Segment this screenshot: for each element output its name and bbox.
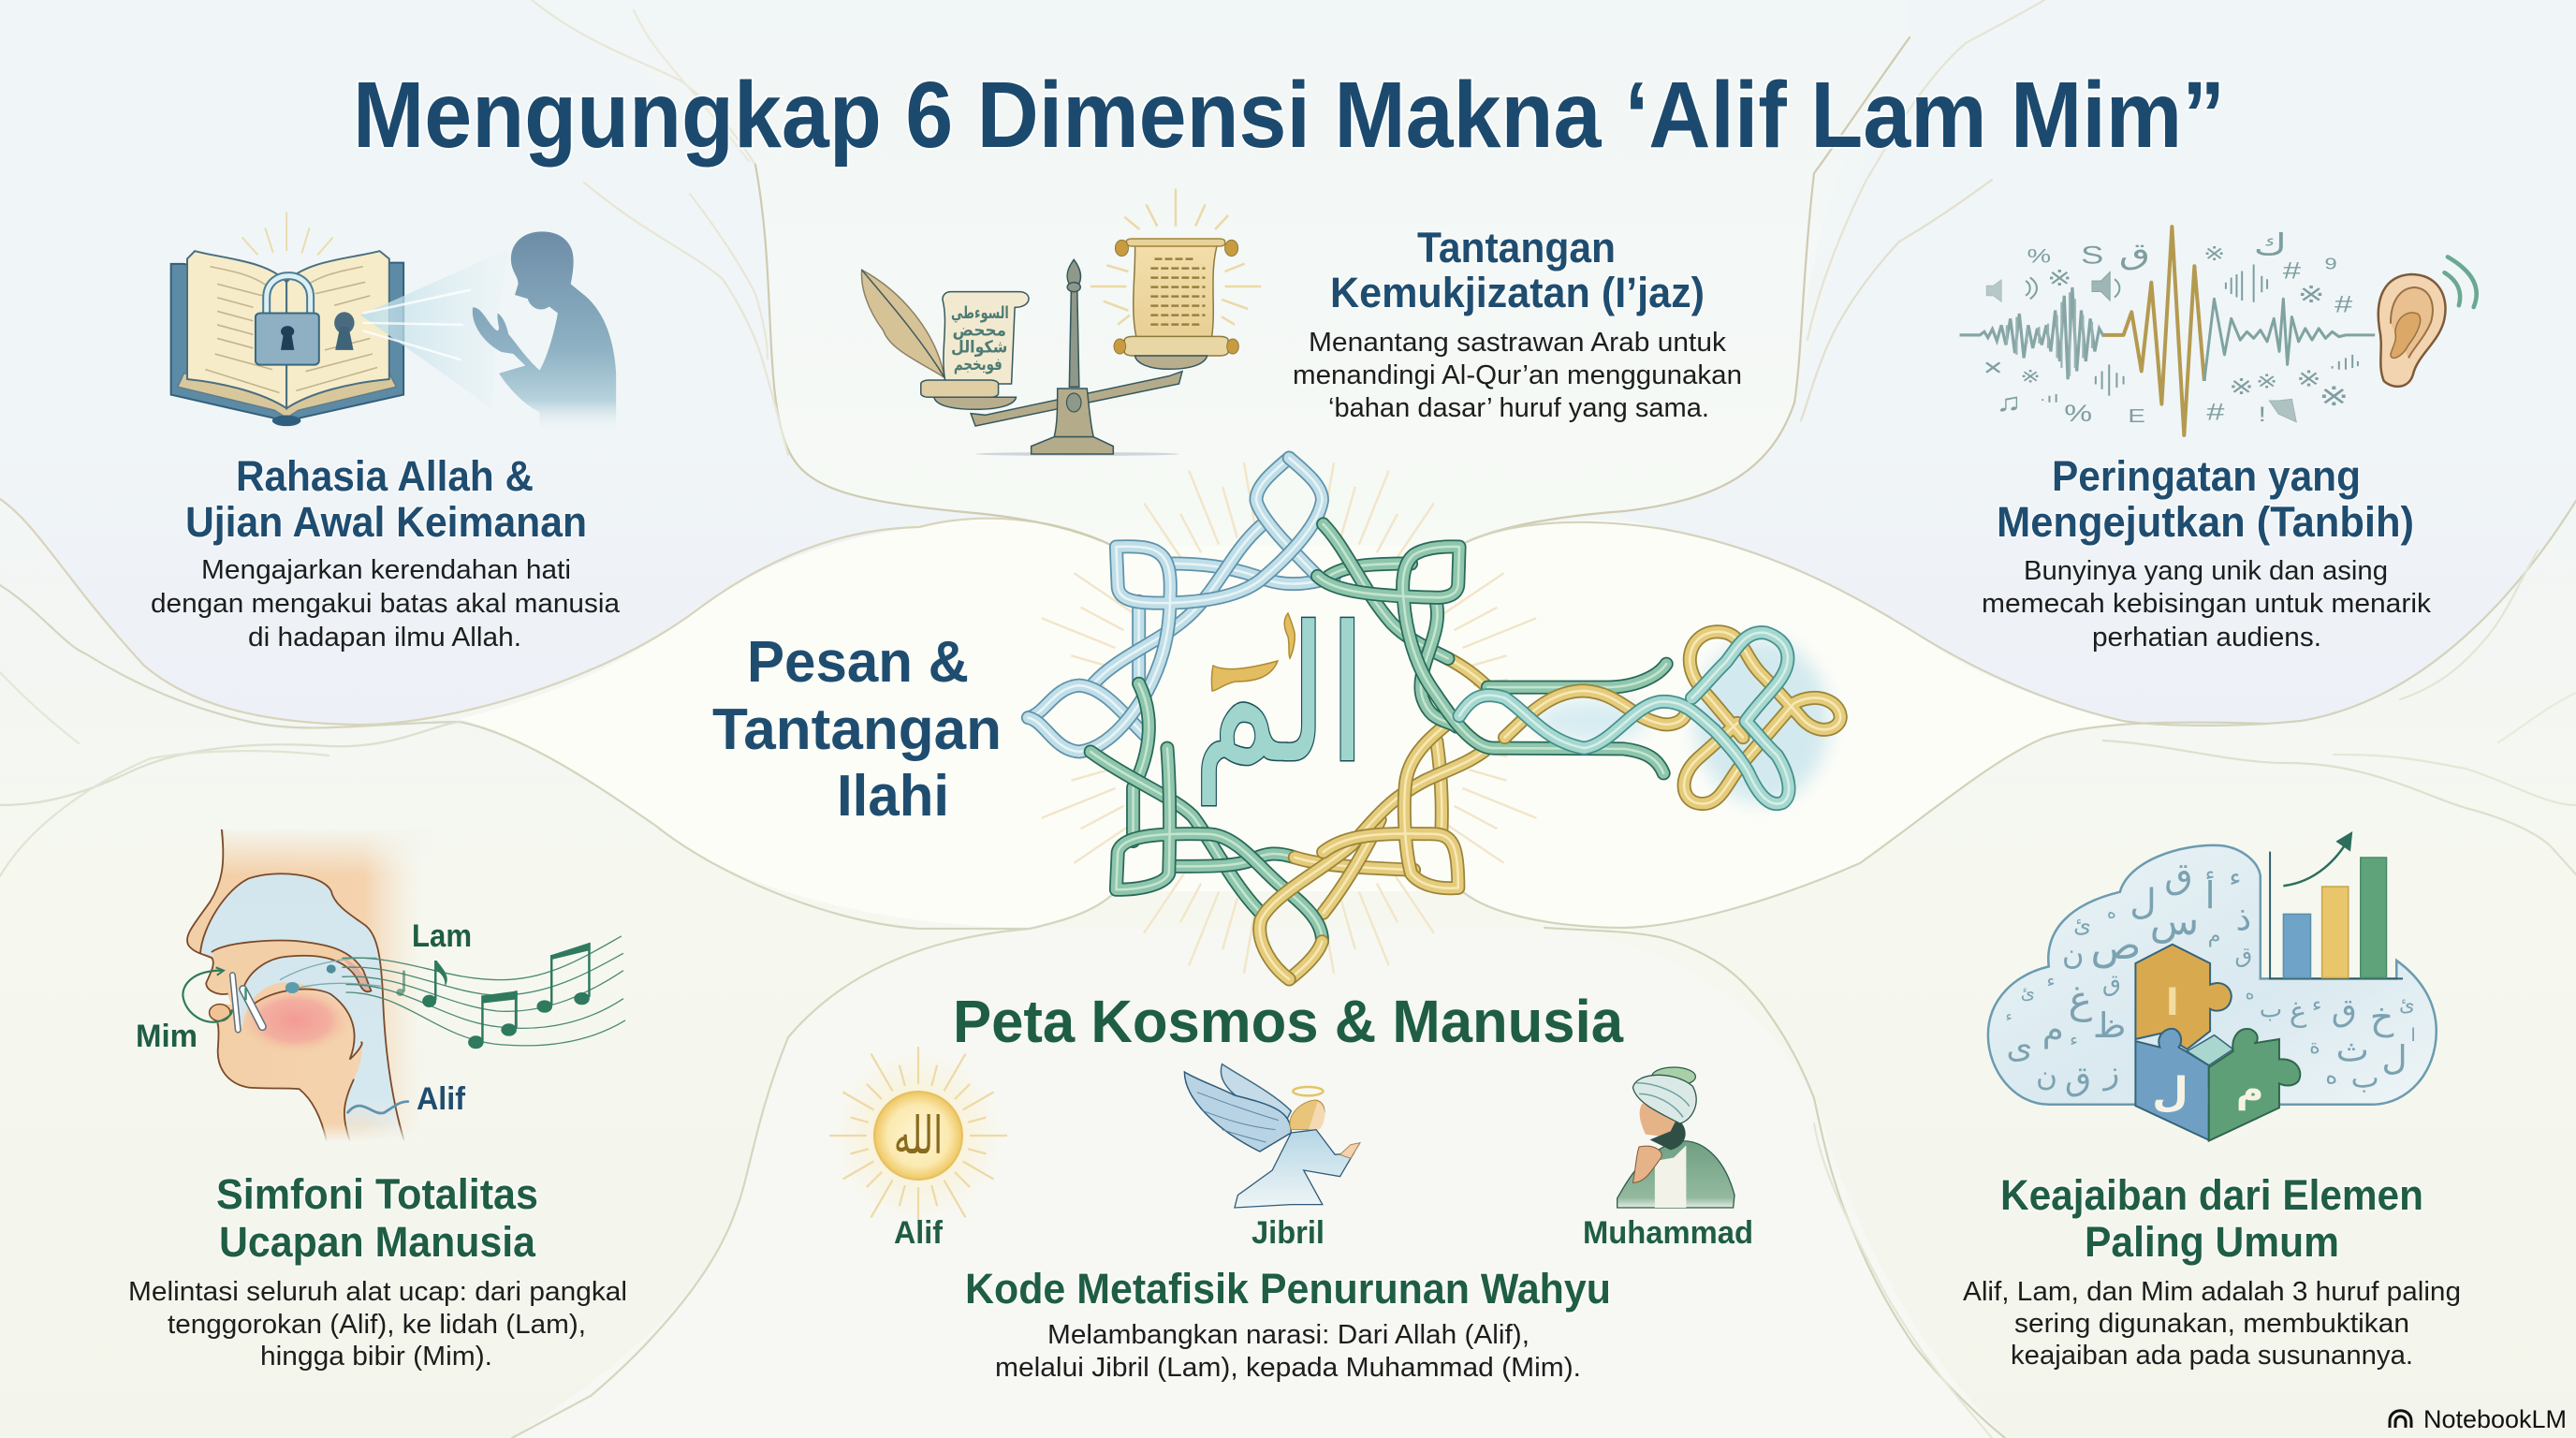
icon: sound wave and ear: [1960, 227, 2477, 435]
icon: letter cloud, puzzle and bar chart: س: [2150, 900, 2199, 944]
panel: Peta Kosmos dan Manusia: [829, 988, 1753, 1383]
heading: Simfoni Totalitas: Simfoni Totalitas: [216, 1170, 538, 1218]
panel: Pesan dan Tantangan Ilahi heading: Pesan &: [747, 630, 969, 695]
heading: Kode Metafisik Penurunan Wahyu: Kode Metafisik Penurunan Wahyu: [965, 1265, 1611, 1313]
text: Keajaiban description: [1963, 1277, 2461, 1371]
sun rays behind star: [1042, 462, 1536, 974]
label: Jibril: Jibril: [1251, 1215, 1325, 1251]
text: Peringatan description: memecah kebisingan untuk menarik: [1982, 589, 2432, 619]
heading: Peta Kosmos & Manusia: Peta Kosmos & Manusia: [953, 988, 1623, 1055]
text: Kode description: Melambangkan narasi: Dari Allah (Alif),: [1047, 1320, 1530, 1350]
icon: letter cloud, puzzle and bar chart: ن: [2062, 938, 2085, 971]
icon: balance scale with scrolls and quill: فويخجم: [954, 355, 1003, 374]
text: Rahasia Allah description: Mengajarkan kerendahan hati: [201, 555, 571, 585]
label: Mim: Mim: [136, 1019, 198, 1054]
icon: letter cloud, puzzle and bar chart: خ: [2370, 998, 2393, 1037]
heading: Simfoni Totalitas: [216, 1170, 538, 1266]
icon: sound wave and ear: !: [2258, 403, 2266, 426]
icon: sound wave and ear: ق: [2119, 238, 2150, 271]
logo: NotebookLM: NotebookLM: [2423, 1405, 2567, 1433]
icon: glowing sun medallion with Allah: [829, 1047, 1007, 1225]
icon: letter cloud, puzzle and bar chart: ق: [2332, 993, 2357, 1028]
heading: Tantangan Kemukjizatan: Kemukjizatan (I’jaz): [1330, 269, 1705, 316]
heading: Peringatan yang Mengejutkan: [1997, 452, 2414, 546]
heading: Rahasia Allah: Rahasia Allah &: [236, 452, 534, 500]
heading: Peringatan yang Mengejutkan: Mengejutkan (Tanbih): [1997, 498, 2414, 546]
icon: letter cloud, puzzle and bar chart: ذ: [2236, 900, 2251, 937]
icon: sound wave and ear: #: [2334, 292, 2352, 317]
icon: letter cloud, puzzle and bar chart: أ: [2204, 872, 2216, 917]
label: Alif: Alif: [894, 1215, 944, 1251]
panel: Simfoni Totalitas Ucapan Manusia: [128, 829, 627, 1372]
illustration: speech organs with music staff: [183, 829, 625, 1142]
icon: Muhammad figure: [1617, 1067, 1734, 1208]
text: Rahasia Allah description: dengan mengakui batas akal manusia: [151, 589, 621, 619]
text: Tantangan description: ‘bahan dasar’ huruf yang sama.: [1328, 393, 1709, 423]
text: Keajaiban description: sering digunakan, membuktikan: [2014, 1309, 2409, 1339]
icon: balance scale with scrolls and quill: السوءطي: [951, 303, 1009, 323]
icon: letter cloud, puzzle and bar chart: ئ: [2021, 984, 2035, 1004]
icon: sound wave and ear: %: [2064, 401, 2092, 427]
icon: sound wave and ear: ※: [2256, 372, 2277, 393]
icon: letter cloud, puzzle and bar chart: ء: [2312, 992, 2321, 1016]
icon: sound wave and ear: ※: [2203, 243, 2225, 265]
interlaced ribbon star and endless knot: [1028, 458, 1840, 979]
icon: letter cloud, puzzle and bar chart: ى: [2006, 1029, 2032, 1064]
icon: sound wave and ear: ♫: [1996, 388, 2022, 417]
icon: letter cloud, puzzle and bar chart: م: [2208, 924, 2220, 946]
icon: sound wave and ear: ※: [2296, 367, 2321, 391]
glow behind knot: [1535, 638, 1829, 803]
icon: sound wave and ear: S: [2081, 241, 2103, 269]
text: Tantangan description: Menantang sastrawan Arab untuk: [1309, 328, 1727, 358]
heading: Tantangan Kemukjizatan: [1330, 224, 1705, 316]
panel: Rahasia Allah: [151, 213, 621, 653]
text: Keajaiban description: Alif, Lam, dan Mim adalah 3 huruf paling: [1963, 1277, 2461, 1307]
icon: letter cloud, puzzle and bar chart: م: [2236, 1069, 2263, 1111]
icon: letter cloud, puzzle and bar chart: ه: [2107, 902, 2116, 922]
text: Rahasia Allah description: [151, 555, 621, 653]
icon: letter cloud, puzzle and bar chart: ء: [2006, 1009, 2012, 1025]
panel: Pesan dan Tantangan Ilahi heading: [712, 630, 1002, 829]
icon: letter cloud, puzzle and bar chart: ز: [2101, 1056, 2119, 1091]
icon: sound wave and ear: ※: [2229, 374, 2254, 399]
icon: letter cloud, puzzle and bar chart: غ: [2069, 978, 2092, 1022]
icon: sound wave and ear: #: [2283, 258, 2301, 284]
icon: letter cloud, puzzle and bar chart: ق: [2164, 857, 2193, 896]
icon: letter cloud, puzzle and bar chart: ن: [2036, 1060, 2057, 1092]
icon: letter cloud, puzzle and bar chart: ئ: [2399, 994, 2415, 1016]
icon: letter cloud, puzzle and bar chart: ث: [2336, 1031, 2369, 1069]
text: Kode description: [995, 1320, 1581, 1383]
text: Kode description: melalui Jibril (Lam), kepada Muhammad (Mim).: [995, 1353, 1581, 1383]
icon: letter cloud, puzzle and bar chart: ق: [2235, 944, 2252, 968]
text: Simfoni description: Melintasi seluruh alat ucap: dari pangkal: [128, 1277, 627, 1307]
text: Peringatan description: perhatian audiens.: [2092, 623, 2321, 653]
icon: letter cloud, puzzle and bar chart: ص: [2090, 923, 2141, 969]
heading: Peringatan yang Mengejutkan: Peringatan yang: [2052, 452, 2361, 500]
icon: letter cloud, puzzle and bar chart: م: [2042, 1011, 2064, 1049]
icon: letter cloud, puzzle and bar chart: ل: [2130, 883, 2157, 922]
panel: Pesan dan Tantangan Ilahi heading: Ilahi: [837, 764, 949, 829]
heading: Simfoni Totalitas: Ucapan Manusia: [219, 1218, 536, 1266]
icon: letter cloud, puzzle and bar chart: ق: [2065, 1059, 2091, 1097]
text: Simfoni description: hingga bibir (Mim).: [260, 1342, 492, 1372]
icon: sound wave and ear: %: [2027, 245, 2051, 268]
icon: open book with padlock and praying figure: [171, 213, 616, 430]
icon: letter cloud, puzzle and bar chart: ه: [2246, 983, 2255, 1003]
icon: letter cloud, puzzle and bar chart: ل: [2152, 1070, 2188, 1115]
heading: Keajaiban dari Elemen: [2000, 1171, 2423, 1266]
icon: letter cloud, puzzle and bar chart: ة: [2309, 1034, 2320, 1058]
icon: letter cloud, puzzle and bar chart: ء: [2046, 972, 2056, 991]
panel: Pesan dan Tantangan Ilahi heading: Tantangan: [712, 697, 1002, 762]
icon: letter cloud, puzzle and bar chart: ب: [2351, 1061, 2379, 1094]
text: Rahasia Allah description: di hadapan ilmu Allah.: [248, 623, 521, 653]
label: Muhammad: Muhammad: [1583, 1215, 1753, 1251]
icon: sound wave and ear: ※: [2298, 282, 2325, 308]
panel: Keajaiban dari Elemen Paling Umum: [1963, 831, 2461, 1371]
icon: letter cloud, puzzle and bar chart: ء: [2070, 1030, 2078, 1049]
icon: letter cloud, puzzle and bar chart: [1988, 831, 2437, 1141]
gold diacritic marks: [1211, 613, 1295, 691]
icon: letter cloud, puzzle and bar chart: ظ: [2093, 1006, 2126, 1046]
icon: angel Jibril: [1184, 1064, 1360, 1208]
icon: sound wave and ear: ※: [2020, 366, 2041, 387]
icon: sound wave and ear: ك: [2254, 228, 2287, 261]
text: Peringatan description: [1982, 556, 2432, 653]
icon: letter cloud, puzzle and bar chart: ا: [2410, 1026, 2416, 1046]
icon: letter cloud, puzzle and bar chart: ه: [2325, 1064, 2337, 1089]
heading: Keajaiban dari Elemen: Keajaiban dari Elemen: [2000, 1171, 2423, 1219]
title: Mengungkap 6 Dimensi Makna ‘Alif Lam Mim”: [353, 63, 2225, 168]
text: Tantangan description: menandingi Al-Qur’an menggunakan: [1293, 360, 1742, 390]
central emblem: interlaced star with Alif Lam Mim: [1028, 458, 1840, 979]
icon: sound wave and ear: ※: [2047, 266, 2072, 290]
icon: letter cloud, puzzle and bar chart: غ: [2290, 995, 2307, 1027]
icon: balance scale with scrolls and quill: [861, 189, 1261, 456]
icon: sound wave and ear: ※: [2319, 383, 2349, 412]
text: Simfoni description: tenggorokan (Alif), ke lidah (Lam),: [168, 1310, 586, 1340]
icon: letter cloud, puzzle and bar chart: ء: [2229, 863, 2241, 891]
heading: Keajaiban dari Elemen: Paling Umum: [2085, 1218, 2339, 1266]
icon: sound wave and ear: E: [2128, 406, 2145, 427]
icon: letter cloud, puzzle and bar chart: ئ: [2073, 914, 2091, 938]
text: Peringatan description: Bunyinya yang unik dan asing: [2024, 556, 2388, 586]
icon: letter cloud, puzzle and bar chart: ب: [2260, 997, 2282, 1022]
heading: Tantangan Kemukjizatan: Tantangan: [1417, 224, 1616, 271]
panel: Peringatan yang Mengejutkan: [1960, 227, 2477, 653]
icon: letter cloud, puzzle and bar chart: ل: [2381, 1039, 2408, 1077]
icon: letter cloud, puzzle and bar chart: ق: [2102, 971, 2121, 996]
icon: letter cloud, puzzle and bar chart: ا: [2166, 983, 2179, 1023]
Arabic calligraphy Alif Lam Mim: الم: [1193, 586, 1367, 806]
icon: sound wave and ear: ✕: [1983, 358, 2004, 379]
panel: Tantangan Kemukjizatan: [861, 189, 1742, 456]
icon: balance scale with scrolls and quill: مححض: [952, 321, 1006, 340]
label: Alif: Alif: [417, 1081, 466, 1117]
label: Lam: Lam: [412, 918, 472, 954]
icon: sound wave and ear: 9: [2324, 256, 2337, 273]
icon: glowing sun medallion with Allah: الله: [894, 1106, 943, 1166]
text: Tantangan description: [1293, 328, 1742, 423]
text: Simfoni description: [128, 1277, 627, 1372]
icon: sound wave and ear: #: [2206, 400, 2225, 425]
heading: Rahasia Allah: Ujian Awal Keimanan: [185, 498, 587, 546]
heading: Rahasia Allah: [185, 452, 587, 546]
icon: balance scale with scrolls and quill: شكوالل: [951, 338, 1007, 357]
text: Keajaiban description: keajaiban ada pada susunannya.: [2011, 1341, 2413, 1371]
